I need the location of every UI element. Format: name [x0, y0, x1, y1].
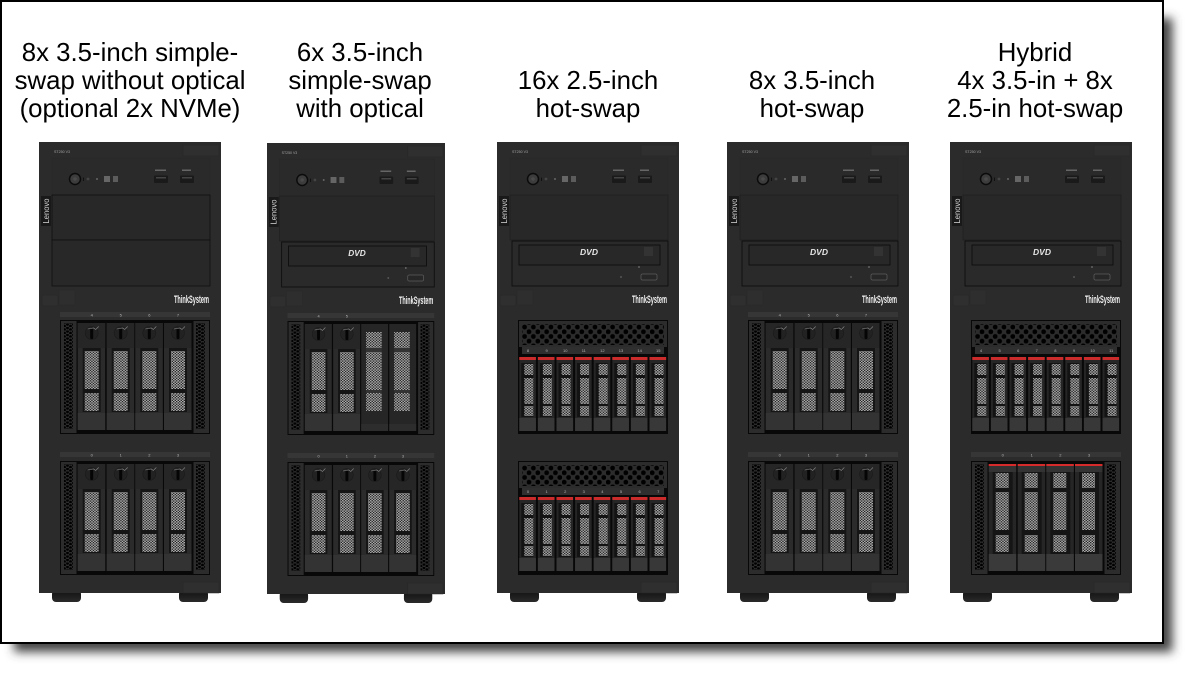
title: hybrid: 4x 3.5-in + 8x [957, 67, 1113, 95]
title: 16x 2.5-inch hot-swap: hot-swap [536, 95, 640, 123]
title: 8x 3.5-inch simple-swap without optical: 8x 3.5-inch simple- [22, 39, 238, 67]
server 4: 8x 3.5-inch hot-swap: 3 [865, 452, 868, 458]
server 4: 8x 3.5-inch hot-swap: 1 [808, 452, 811, 458]
server 1: 8x 3.5-inch simple-swap without optical: 7 [177, 312, 180, 318]
server 2: 6x 3.5-inch simple-swap with optical: Lenovo [270, 199, 279, 224]
server 5: hybrid 4x 3.5-inch + 8x 2.5-inch hot-swap: 10 [1090, 348, 1096, 353]
server 1: 8x 3.5-inch simple-swap without optical: Lenovo [42, 198, 51, 224]
server 4: 8x 3.5-inch hot-swap: 7 [865, 312, 868, 318]
title: 6x 3.5-inch simple-swap with optical: 6x 3.5-inch [297, 39, 423, 67]
server 5: hybrid 4x 3.5-inch + 8x 2.5-inch hot-swap: ST250 V3 [965, 150, 981, 154]
server 5: hybrid 4x 3.5-inch + 8x 2.5-inch hot-swap: 6 [1017, 348, 1020, 353]
title: hybrid: Hybrid [998, 39, 1072, 67]
server 2: 6x 3.5-inch simple-swap with optical: 1 [346, 453, 348, 459]
title: 8x 3.5-inch simple-swap without optical: (optional 2x NVMe) [20, 95, 240, 123]
server 3: 16x 2.5-inch hot-swap: 0 [527, 489, 530, 494]
server 5: hybrid 4x 3.5-inch + 8x 2.5-inch hot-swap [950, 142, 1132, 602]
server 5: hybrid 4x 3.5-inch + 8x 2.5-inch hot-swap: 11 [1109, 348, 1114, 353]
server 5: hybrid 4x 3.5-inch + 8x 2.5-inch hot-swap: 5 [998, 348, 1001, 353]
server 2: 6x 3.5-inch simple-swap with optical: 0 [317, 453, 320, 459]
server 1: 8x 3.5-inch simple-swap without optical [39, 142, 221, 602]
server 5: hybrid 4x 3.5-inch + 8x 2.5-inch hot-swap: 2 [1059, 452, 1062, 458]
server 3: 16x 2.5-inch hot-swap: ST250 V3 [512, 150, 528, 154]
server 2: 6x 3.5-inch simple-swap with optical: 4 [317, 313, 320, 319]
title: hybrid: 2.5-in hot-swap [947, 95, 1123, 123]
server 3: 16x 2.5-inch hot-swap: 3 [583, 489, 586, 494]
server 4: 8x 3.5-inch hot-swap: ThinkSystem [862, 294, 897, 306]
server 1: 8x 3.5-inch simple-swap without optical: 4 [91, 312, 94, 318]
server 1: 8x 3.5-inch simple-swap without optical: 2 [148, 452, 151, 458]
server 4: 8x 3.5-inch hot-swap: 2 [836, 452, 839, 458]
title: 8x 3.5-inch hot-swap: 8x 3.5-inch [749, 67, 875, 95]
server 4: 8x 3.5-inch hot-swap: 5 [808, 312, 811, 318]
server 5: hybrid 4x 3.5-inch + 8x 2.5-inch hot-swap: 4 [980, 348, 983, 353]
server 3: 16x 2.5-inch hot-swap: 12 [600, 348, 605, 353]
server 2: 6x 3.5-inch simple-swap with optical: 3 [402, 453, 405, 459]
server 5: hybrid 4x 3.5-inch + 8x 2.5-inch hot-swap: 7 [1036, 348, 1039, 353]
server 4: 8x 3.5-inch hot-swap: 0 [779, 452, 782, 458]
title: 6x 3.5-inch simple-swap with optical: simple-swap [288, 67, 432, 95]
server 3: 16x 2.5-inch hot-swap: 13 [619, 348, 624, 353]
server 3: 16x 2.5-inch hot-swap: 1 [545, 489, 548, 494]
server 5: hybrid 4x 3.5-inch + 8x 2.5-inch hot-swap: Lenovo [953, 198, 962, 224]
server 3: 16x 2.5-inch hot-swap: 14 [637, 348, 643, 353]
server 3: 16x 2.5-inch hot-swap: 6 [638, 489, 641, 494]
server 3: 16x 2.5-inch hot-swap: 5 [620, 489, 623, 494]
title: 8x 3.5-inch hot-swap: hot-swap [760, 95, 864, 123]
server 1: 8x 3.5-inch simple-swap without optical: 3 [177, 452, 180, 458]
server 1: 8x 3.5-inch simple-swap without optical: 6 [148, 312, 151, 318]
server 1: 8x 3.5-inch simple-swap without optical: ST250 V3 [54, 150, 70, 154]
server 4: 8x 3.5-inch hot-swap [727, 142, 909, 602]
server 1: 8x 3.5-inch simple-swap without optical: 5 [120, 312, 123, 318]
server 3: 16x 2.5-inch hot-swap: Lenovo [500, 198, 509, 224]
server 2: 6x 3.5-inch simple-swap with optical: DVD [348, 248, 366, 258]
server 5: hybrid 4x 3.5-inch + 8x 2.5-inch hot-swap: 3 [1088, 452, 1091, 458]
server 3: 16x 2.5-inch hot-swap: DVD [580, 247, 598, 257]
server 3: 16x 2.5-inch hot-swap: 2 [564, 489, 567, 494]
title: 6x 3.5-inch simple-swap with optical: with optical [295, 95, 424, 123]
server 4: 8x 3.5-inch hot-swap: DVD [810, 247, 828, 257]
server 5: hybrid 4x 3.5-inch + 8x 2.5-inch hot-swap: DVD [1033, 247, 1051, 257]
server 1: 8x 3.5-inch simple-swap without optical: 0 [91, 452, 94, 458]
server 5: hybrid 4x 3.5-inch + 8x 2.5-inch hot-swap: 8 [1054, 348, 1057, 353]
server 5: hybrid 4x 3.5-inch + 8x 2.5-inch hot-swap: ThinkSystem [1085, 294, 1120, 306]
server 4: 8x 3.5-inch hot-swap: 6 [836, 312, 839, 318]
server 2: 6x 3.5-inch simple-swap with optical: ST250 V3 [282, 151, 297, 155]
server 3: 16x 2.5-inch hot-swap [497, 142, 679, 602]
server 2: 6x 3.5-inch simple-swap with optical: ThinkSystem [399, 295, 433, 307]
server 3: 16x 2.5-inch hot-swap: ThinkSystem [632, 294, 667, 306]
server 5: hybrid 4x 3.5-inch + 8x 2.5-inch hot-swap: 9 [1073, 348, 1076, 353]
title: 8x 3.5-inch simple-swap without optical: swap without optical [15, 67, 245, 95]
server 3: 16x 2.5-inch hot-swap: 15 [656, 348, 661, 353]
server 2: 6x 3.5-inch simple-swap with optical: 2 [374, 453, 376, 459]
server 3: 16x 2.5-inch hot-swap: 10 [563, 348, 568, 353]
server 1: 8x 3.5-inch simple-swap without optical: 1 [120, 452, 123, 458]
server 1: 8x 3.5-inch simple-swap without optical: ThinkSystem [174, 294, 209, 306]
server 2: 6x 3.5-inch simple-swap with optical [267, 143, 445, 603]
server 4: 8x 3.5-inch hot-swap: Lenovo [730, 198, 739, 224]
title: 16x 2.5-inch hot-swap: 16x 2.5-inch [518, 67, 658, 95]
server 5: hybrid 4x 3.5-inch + 8x 2.5-inch hot-swap: 0 [1002, 452, 1005, 458]
server 4: 8x 3.5-inch hot-swap: ST250 V3 [742, 150, 758, 154]
server 3: 16x 2.5-inch hot-swap: 8 [527, 348, 530, 353]
server 4: 8x 3.5-inch hot-swap: 4 [779, 312, 782, 318]
server 3: 16x 2.5-inch hot-swap: 9 [545, 348, 548, 353]
server 2: 6x 3.5-inch simple-swap with optical: 5 [346, 313, 349, 319]
server 5: hybrid 4x 3.5-inch + 8x 2.5-inch hot-swap: 1 [1031, 452, 1034, 458]
server 3: 16x 2.5-inch hot-swap: 11 [582, 348, 587, 353]
server 3: 16x 2.5-inch hot-swap: 4 [601, 489, 604, 494]
server 3: 16x 2.5-inch hot-swap: 7 [657, 489, 660, 494]
